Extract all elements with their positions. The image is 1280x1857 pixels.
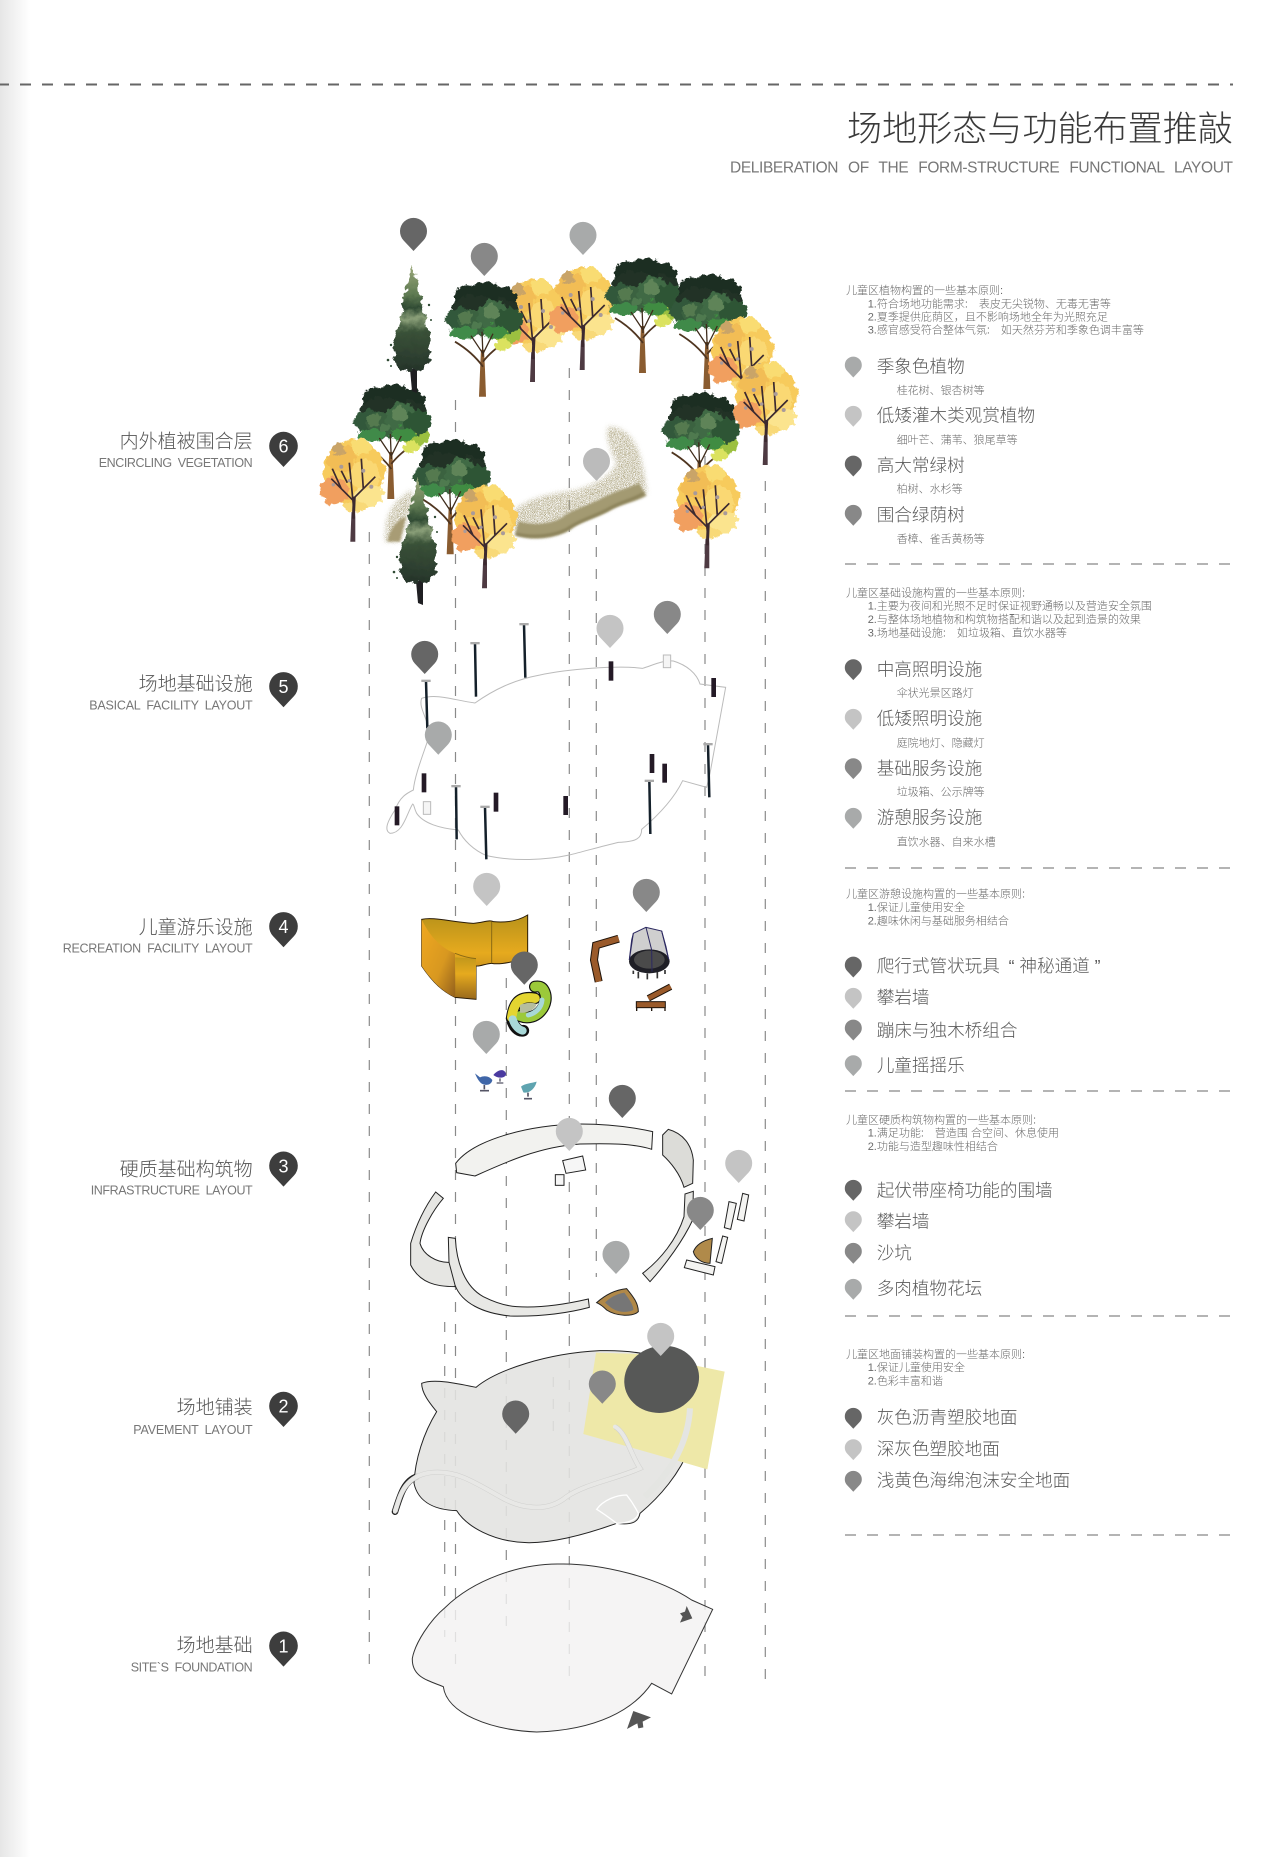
legend items: 桂花树、银杏树等 bbox=[897, 383, 985, 397]
wall right arc bbox=[643, 1191, 693, 1282]
legend items: 游憩服务设施 bbox=[877, 808, 982, 828]
layer 5: basic facilities bbox=[387, 623, 726, 860]
left label 4: 4 bbox=[278, 917, 289, 937]
legend items: 低矮灌木类观赏植物 bbox=[877, 406, 1035, 426]
legend items: 伞状光景区路灯 bbox=[897, 687, 974, 700]
left label 4: RECREATION FACILITY LAYOUT bbox=[63, 941, 253, 955]
panel: pavement notes bbox=[845, 1347, 1070, 1492]
principles text: 1.保证儿童使用安全 bbox=[868, 900, 965, 914]
left label 4 bbox=[63, 912, 298, 955]
legend items bbox=[845, 356, 1035, 546]
legend items: 多肉植物花坛 bbox=[877, 1279, 982, 1299]
legend items: 季象色植物 bbox=[877, 356, 965, 376]
principles text: 儿童区硬质构筑物构置的一些基本原则: bbox=[846, 1112, 1036, 1126]
left label 6: 6 bbox=[278, 436, 289, 456]
tree group east bbox=[662, 392, 740, 568]
icon: entry arrow bbox=[627, 1711, 651, 1729]
yellow foam area bbox=[583, 1353, 725, 1469]
principles text: 1.主要为夜间和光照不足时保证视野通畅以及营造安全氛围 bbox=[868, 599, 1152, 613]
spring riders bbox=[475, 1073, 492, 1085]
legend items: 攀岩墙 bbox=[877, 988, 929, 1008]
principles text: 2.夏季提供庇荫区，且不影响场地全年为光照充足 bbox=[868, 309, 1108, 323]
site outline bbox=[387, 661, 726, 860]
principles text bbox=[846, 1112, 1059, 1153]
left label 2: 2 bbox=[278, 1397, 289, 1417]
legend items: 深灰色塑胶地面 bbox=[877, 1439, 1000, 1459]
left label 4: 儿童游乐设施 bbox=[139, 916, 253, 938]
legend items: 香樟、雀舌黄杨等 bbox=[897, 532, 985, 546]
layer 3: infrastructure walls bbox=[411, 1124, 749, 1316]
left label 2 bbox=[133, 1392, 298, 1437]
subtitle: DELIBERATION OF THE FORM-STRUCTURE FUNCTIONAL LAYOUT bbox=[730, 160, 1234, 176]
principles text bbox=[846, 283, 1144, 336]
legend items: 垃圾箱、公示牌等 bbox=[897, 785, 985, 799]
principles text: 2.功能与造型趣味性相结合 bbox=[868, 1140, 998, 1153]
principles text: 1.保证儿童使用安全 bbox=[868, 1360, 965, 1374]
principles text: 儿童区基础设施构置的一些基本原则: bbox=[846, 586, 1025, 600]
legend items bbox=[845, 1180, 1053, 1300]
layer 1: site foundation bbox=[412, 1564, 713, 1732]
small blocks bbox=[563, 1156, 586, 1173]
principles text: 2.趣味休闲与基础服务相结合 bbox=[868, 914, 1009, 927]
principles text: 2.色彩丰富和谐 bbox=[868, 1373, 943, 1387]
legend items: 中高照明设施 bbox=[877, 659, 982, 679]
vertical dashed projection lines bbox=[369, 368, 765, 1679]
left label 3 bbox=[91, 1152, 298, 1198]
left label 2: 场地铺装 bbox=[177, 1396, 253, 1418]
legend items bbox=[845, 956, 1101, 1076]
left label 5: 场地基础设施 bbox=[139, 673, 253, 695]
legend items: 细叶芒、蒲苇、狼尾草等 bbox=[897, 432, 1018, 446]
left label 5: BASICAL FACILITY LAYOUT bbox=[89, 698, 253, 712]
panel: facility notes bbox=[845, 586, 1152, 848]
legend items: 直饮水器、自来水槽 bbox=[897, 834, 996, 848]
panel: vegetation notes bbox=[845, 283, 1144, 546]
principles text: 3.感官感受符合整体气氛: 如天然芬芳和季象色调丰富等 bbox=[868, 322, 1144, 336]
planter bbox=[693, 1238, 712, 1263]
legend items: 沙坑 bbox=[877, 1243, 912, 1263]
tall lamps bbox=[426, 624, 709, 859]
sandpit bbox=[597, 1289, 638, 1315]
wall left bbox=[411, 1192, 455, 1287]
layer 2: pavement bbox=[395, 1337, 725, 1543]
legend items: 爬行式管状玩具 “ 神秘通道 ” bbox=[877, 956, 1101, 976]
principles text bbox=[846, 586, 1152, 639]
principles text bbox=[846, 887, 1025, 927]
legend items bbox=[845, 1408, 1070, 1492]
principles text: 3.场地基础设施: 如垃圾箱、直饮水器等 bbox=[868, 625, 1067, 639]
icon: north arrow small bbox=[680, 1606, 692, 1623]
bollards bbox=[395, 661, 716, 825]
left label 6: 内外植被围合层 bbox=[120, 430, 253, 452]
panel: hardscape notes bbox=[845, 1112, 1059, 1300]
wooden balance beams bbox=[594, 939, 671, 998]
left label 1: SITE`S FOUNDATION bbox=[131, 1660, 253, 1674]
legend items: 蹦床与独木桥组合 bbox=[877, 1020, 1017, 1040]
dark asphalt ellipse bbox=[617, 1337, 707, 1421]
top dashed rule bbox=[0, 84, 1233, 86]
service bins bbox=[423, 655, 671, 814]
left label 1 bbox=[131, 1632, 298, 1674]
map pins on layers bbox=[400, 218, 752, 1434]
wall bottom arc bbox=[448, 1237, 589, 1316]
legend items: 基础服务设施 bbox=[877, 759, 982, 779]
left label 6: ENCIRCLING VEGETATION bbox=[99, 456, 253, 470]
title: 场地形态与功能布置推敲 bbox=[847, 110, 1233, 149]
left label 1: 1 bbox=[278, 1636, 289, 1656]
tail of path outside pavement bbox=[395, 1477, 417, 1512]
climbing wall bbox=[422, 915, 528, 999]
left label 3: INFRASTRUCTURE LAYOUT bbox=[91, 1184, 253, 1198]
left label 6 bbox=[99, 430, 298, 470]
legend items: 柏树、水杉等 bbox=[897, 482, 963, 496]
legend items: 高大常绿树 bbox=[877, 456, 965, 476]
tree group north bbox=[387, 258, 797, 465]
legend items: 浅黄色海绵泡沫安全地面 bbox=[877, 1471, 1070, 1491]
left label 5 bbox=[89, 672, 298, 712]
principles text bbox=[846, 1347, 1025, 1387]
legend items: 儿童摇摇乐 bbox=[877, 1055, 965, 1075]
sand mound bbox=[385, 427, 647, 542]
left label 2: PAVEMENT LAYOUT bbox=[133, 1423, 253, 1437]
layer 4: recreation facilities bbox=[422, 915, 671, 1099]
winding path bbox=[395, 1427, 640, 1512]
trampoline bbox=[629, 927, 669, 959]
wall right bbox=[663, 1129, 693, 1187]
page edge shading bbox=[0, 0, 30, 1857]
principles text: 儿童区植物构置的一些基本原则: bbox=[846, 283, 1003, 297]
principles text: 儿童区地面铺装构置的一些基本原则: bbox=[846, 1347, 1025, 1361]
legend items: 灰色沥青塑胶地面 bbox=[877, 1408, 1017, 1428]
principles text: 2.与整体场地植物和构筑物搭配和谐以及起到造景的效果 bbox=[868, 612, 1141, 626]
legend items: 攀岩墙 bbox=[877, 1211, 929, 1231]
legend items: 庭院地灯、隐藏灯 bbox=[897, 735, 985, 749]
principles text: 儿童区游憩设施构置的一些基本原则: bbox=[846, 887, 1025, 901]
legend items: 围合绿荫树 bbox=[877, 505, 965, 525]
left label 1: 场地基础 bbox=[177, 1635, 253, 1657]
panel: recreation notes bbox=[845, 887, 1101, 1076]
left label 3: 3 bbox=[278, 1156, 289, 1176]
tree group west bbox=[319, 384, 431, 542]
left label 5: 5 bbox=[278, 677, 289, 697]
legend items: 起伏带座椅功能的围墙 bbox=[877, 1180, 1053, 1200]
flower bed bars bbox=[684, 1193, 749, 1275]
principles text: 1.符合场地功能需求: 表皮无尖锐物、无毒无害等 bbox=[868, 296, 1111, 310]
curved bench wall top bbox=[456, 1124, 653, 1176]
legend items: 低矮照明设施 bbox=[877, 709, 982, 729]
principles text: 1.满足功能: 营造围 合空间、休息使用 bbox=[868, 1126, 1059, 1140]
legend items bbox=[845, 659, 996, 848]
left label 3: 硬质基础构筑物 bbox=[120, 1159, 253, 1181]
crawl tube bbox=[512, 986, 546, 1031]
tree group south-west bbox=[393, 439, 516, 605]
layer 6: encircling vegetation bbox=[319, 258, 797, 605]
